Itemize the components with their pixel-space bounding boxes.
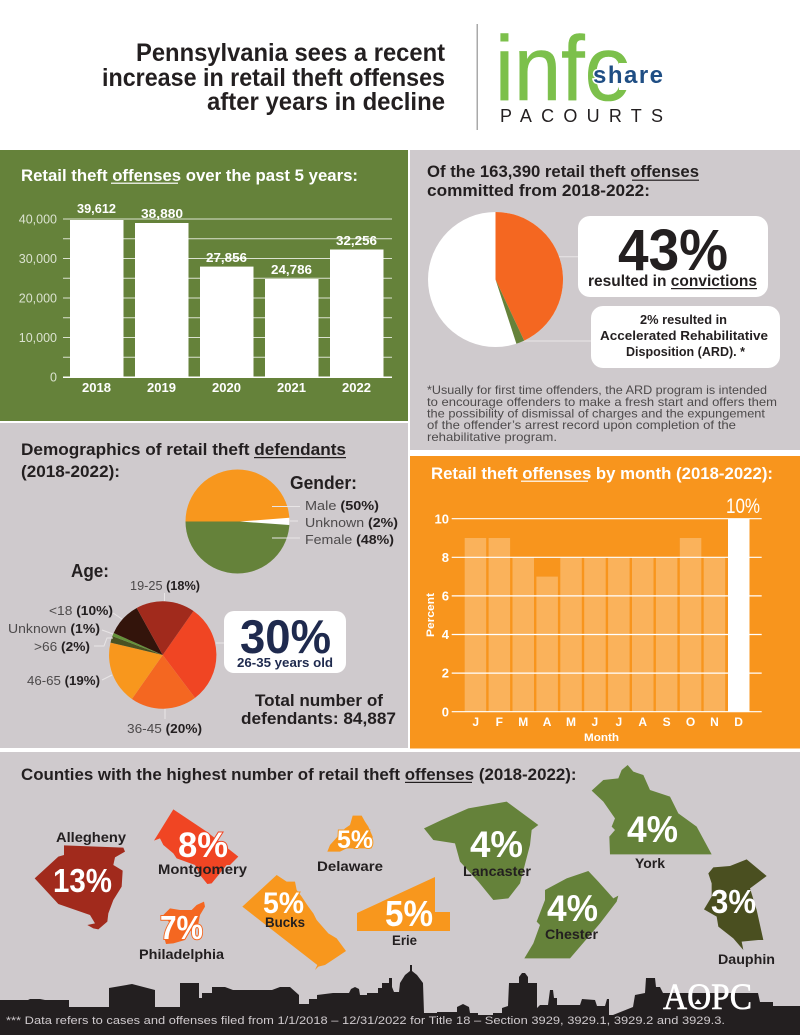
pie chart: age bbox=[94, 593, 224, 719]
bar chart: monthly percent: A bbox=[638, 715, 647, 729]
bar chart: monthly percent: J bbox=[592, 715, 598, 729]
bar chart: yearly offenses: 2018 bbox=[82, 380, 111, 395]
bar chart: yearly offenses: 24,786 bbox=[271, 262, 312, 277]
bar chart: monthly percent: D bbox=[734, 715, 743, 729]
county: Philadelphia 7% bbox=[139, 902, 224, 962]
county: Philadelphia 7%: Philadelphia bbox=[139, 946, 224, 962]
heading: 163,390 offenses: committed from 2018-2022: bbox=[427, 182, 650, 200]
footnote: data source: *** Data refers to cases and offenses filed from 1/1/2018 – 12/31/2022 for Title 18 – Section 3929, 3929.1, 3929.2 and 3929.3. bbox=[6, 1015, 725, 1027]
logo: infoshare PA Courts: share bbox=[593, 62, 663, 89]
county: Chester 4%: Chester bbox=[545, 926, 599, 942]
total number of defendants bbox=[241, 691, 396, 728]
callout: 30% aged 26-35 bbox=[224, 610, 346, 673]
bar chart: monthly percent: 8 bbox=[442, 550, 449, 565]
callout: 2% ARD bbox=[591, 306, 780, 368]
logo: infoshare PA Courts: PACOURTS bbox=[500, 106, 663, 126]
footnote: ARD explanation: *Usually for first time offenders, the ARD program is intended bbox=[427, 383, 767, 397]
panel: offenses over 5 years bbox=[0, 150, 408, 421]
county: Bucks 5%: 5% bbox=[263, 887, 304, 920]
county: Chester 4% bbox=[524, 871, 618, 958]
logo: infoshare PA Courts: info bbox=[495, 18, 632, 120]
legend: gender: Unknown (2%) bbox=[305, 515, 398, 530]
bar chart: monthly percent: Percent bbox=[425, 593, 437, 637]
bar chart: yearly offenses: 10,000 bbox=[19, 331, 57, 345]
bar chart: yearly offenses: 2019 bbox=[147, 380, 176, 395]
bar chart: monthly percent: 0 bbox=[442, 704, 449, 720]
heading: demographics: (2018-2022): bbox=[21, 463, 120, 481]
bar chart: yearly offenses: 2022 bbox=[342, 380, 371, 395]
bar chart: yearly offenses: 30,000 bbox=[19, 252, 57, 266]
panel: counties bbox=[0, 752, 800, 1035]
heading: demographics bbox=[21, 441, 346, 481]
bar chart: yearly offenses: 40,000 bbox=[19, 212, 57, 226]
heading: demographics: Demographics of retail theft defendants bbox=[21, 441, 346, 459]
bar chart: monthly percent: M bbox=[566, 715, 576, 729]
county: Delaware 5%: Delaware bbox=[317, 858, 383, 874]
county: Dauphin 3%: Dauphin bbox=[718, 951, 775, 967]
footnote: ARD explanation: to encourage offenders to make a fresh start and offers them bbox=[427, 395, 777, 409]
legend: age: 46-65 (19%) bbox=[27, 673, 100, 688]
county: Lancaster 4% bbox=[424, 802, 538, 900]
county: Bucks 5%: Bucks bbox=[265, 914, 305, 930]
bar chart: monthly percent: O bbox=[686, 715, 695, 729]
legend: gender: Gender: bbox=[290, 473, 357, 493]
footnote: ARD explanation: the possibility of dismissal of charges and the expungement bbox=[427, 406, 766, 420]
bar chart: monthly percent: 6 bbox=[442, 588, 449, 604]
heading: offenses by month: Retail theft offenses by month (2018-2022): bbox=[431, 464, 773, 483]
county: Montgomery 8%: Montgomery bbox=[158, 861, 247, 877]
legend: gender: Male (50%) bbox=[305, 498, 379, 513]
county: Erie 5% bbox=[357, 877, 450, 948]
legend: age: 36-45 (20%) bbox=[127, 721, 202, 736]
header title: Pennsylvania sees a recent bbox=[136, 39, 446, 67]
heading: 163,390 offenses: Of the 163,390 retail theft offenses bbox=[427, 163, 699, 181]
footnote: ARD explanation bbox=[427, 383, 777, 444]
county: Montgomery 8%: 8% bbox=[178, 826, 228, 865]
bar chart: yearly offenses: 39,612 bbox=[77, 201, 116, 216]
bar chart: monthly percent: 2 bbox=[442, 666, 449, 680]
county: Allegheny 13%: 13% bbox=[53, 862, 112, 899]
county: Dauphin 3%: 3% bbox=[711, 883, 756, 920]
county: Allegheny 13% bbox=[35, 829, 126, 929]
county: Dauphin 3% bbox=[704, 859, 775, 967]
bar chart: yearly offenses: 27,856 bbox=[206, 250, 247, 265]
legend: age: <18 (10%) bbox=[49, 603, 113, 618]
bar chart: yearly offenses: 38,880 bbox=[141, 206, 183, 221]
heading: offenses over the past 5 years: Retail theft offenses over the past 5 years: bbox=[21, 166, 358, 185]
callout: 30% aged 26-35: 30% bbox=[240, 610, 331, 663]
panel: case outcomes bbox=[410, 150, 800, 450]
bar chart: yearly offenses: 20,000 bbox=[19, 292, 57, 306]
legend: gender bbox=[290, 473, 398, 547]
heading: 163,390 offenses bbox=[427, 163, 699, 200]
bar chart: monthly percent: M bbox=[518, 715, 528, 729]
legend: age: Unknown (1%) bbox=[8, 621, 100, 636]
bar chart: monthly percent: 10 bbox=[435, 512, 449, 526]
bar chart: monthly percent: 4 bbox=[442, 627, 450, 642]
county: Lancaster 4%: 4% bbox=[470, 824, 523, 865]
callout: 43% convictions: resulted in convictions bbox=[588, 273, 757, 290]
county: Lancaster 4%: Lancaster bbox=[463, 863, 532, 879]
county: Allegheny 13%: Allegheny bbox=[56, 829, 126, 845]
callout: 30% aged 26-35: 26-35 years old bbox=[237, 655, 333, 670]
legend: age: >66 (2%) bbox=[34, 639, 90, 654]
heading: counties: Counties with the highest number of retail theft offenses (2018-2022): bbox=[21, 766, 576, 784]
county: Delaware 5%: 5% bbox=[337, 826, 373, 854]
callout: 2% ARD: Disposition (ARD). * bbox=[626, 344, 746, 359]
bar chart: yearly offenses: 2021 bbox=[277, 380, 306, 395]
header title: after years in decline bbox=[207, 88, 445, 116]
header title bbox=[102, 39, 446, 116]
county: Erie 5%: 5% bbox=[385, 893, 433, 934]
bar chart: monthly percent: N bbox=[710, 715, 719, 729]
footnote: ARD explanation: of the offender’s arrest record upon completion of the bbox=[427, 418, 736, 432]
county: Chester 4%: 4% bbox=[547, 888, 598, 929]
county: Montgomery 8% bbox=[154, 809, 247, 884]
bar chart: monthly percent: S bbox=[663, 715, 671, 729]
callout: 43% convictions bbox=[578, 216, 768, 297]
panel: demographics bbox=[0, 423, 408, 748]
bar chart: monthly percent: J bbox=[615, 715, 622, 729]
county: Philadelphia 7%: 7% bbox=[160, 909, 203, 946]
bar chart: monthly percent: A bbox=[543, 715, 552, 729]
county: Delaware 5% bbox=[317, 816, 383, 874]
county: York 4%: York bbox=[635, 855, 665, 871]
county: Erie 5%: Erie bbox=[392, 932, 417, 948]
total number of defendants: defendants: 84,887 bbox=[241, 709, 396, 728]
panel: offenses by month bbox=[410, 456, 800, 748]
bar chart: monthly percent: F bbox=[496, 715, 503, 729]
bar chart: yearly offenses: 32,256 bbox=[336, 233, 377, 248]
bar chart: monthly percent: 10% bbox=[726, 495, 760, 518]
total number of defendants: Total number of bbox=[255, 691, 383, 710]
county: York 4%: 4% bbox=[627, 809, 678, 850]
callout: 43% convictions: 43% bbox=[618, 218, 728, 283]
bar chart: yearly offenses: 2020 bbox=[212, 380, 241, 395]
bar chart: monthly percent: J bbox=[472, 715, 479, 729]
skyline silhouette bbox=[0, 965, 800, 1035]
header title: increase in retail theft offenses bbox=[102, 64, 445, 92]
footnote: ARD explanation: rehabilitative program. bbox=[427, 430, 557, 444]
bar chart: yearly offenses: 0 bbox=[50, 370, 57, 384]
callout: 2% ARD: Accelerated Rehabilitative bbox=[600, 328, 768, 343]
county: Bucks 5% bbox=[242, 875, 346, 970]
legend: age: Age: bbox=[71, 561, 109, 581]
callout: 2% ARD: 2% resulted in bbox=[640, 312, 727, 327]
AOPC logo: AOPC bbox=[663, 977, 752, 1018]
legend: age: 19-25 (18%) bbox=[130, 578, 200, 593]
county: York 4% bbox=[592, 765, 712, 871]
bar chart: yearly offenses bbox=[19, 201, 392, 395]
pie chart: gender bbox=[186, 470, 300, 574]
pie chart: outcomes bbox=[428, 212, 563, 347]
legend: gender: Female (48%) bbox=[305, 532, 394, 547]
bar chart: monthly percent: Month bbox=[584, 732, 619, 744]
legend: age bbox=[8, 561, 202, 736]
bar chart: monthly percent bbox=[425, 495, 762, 744]
